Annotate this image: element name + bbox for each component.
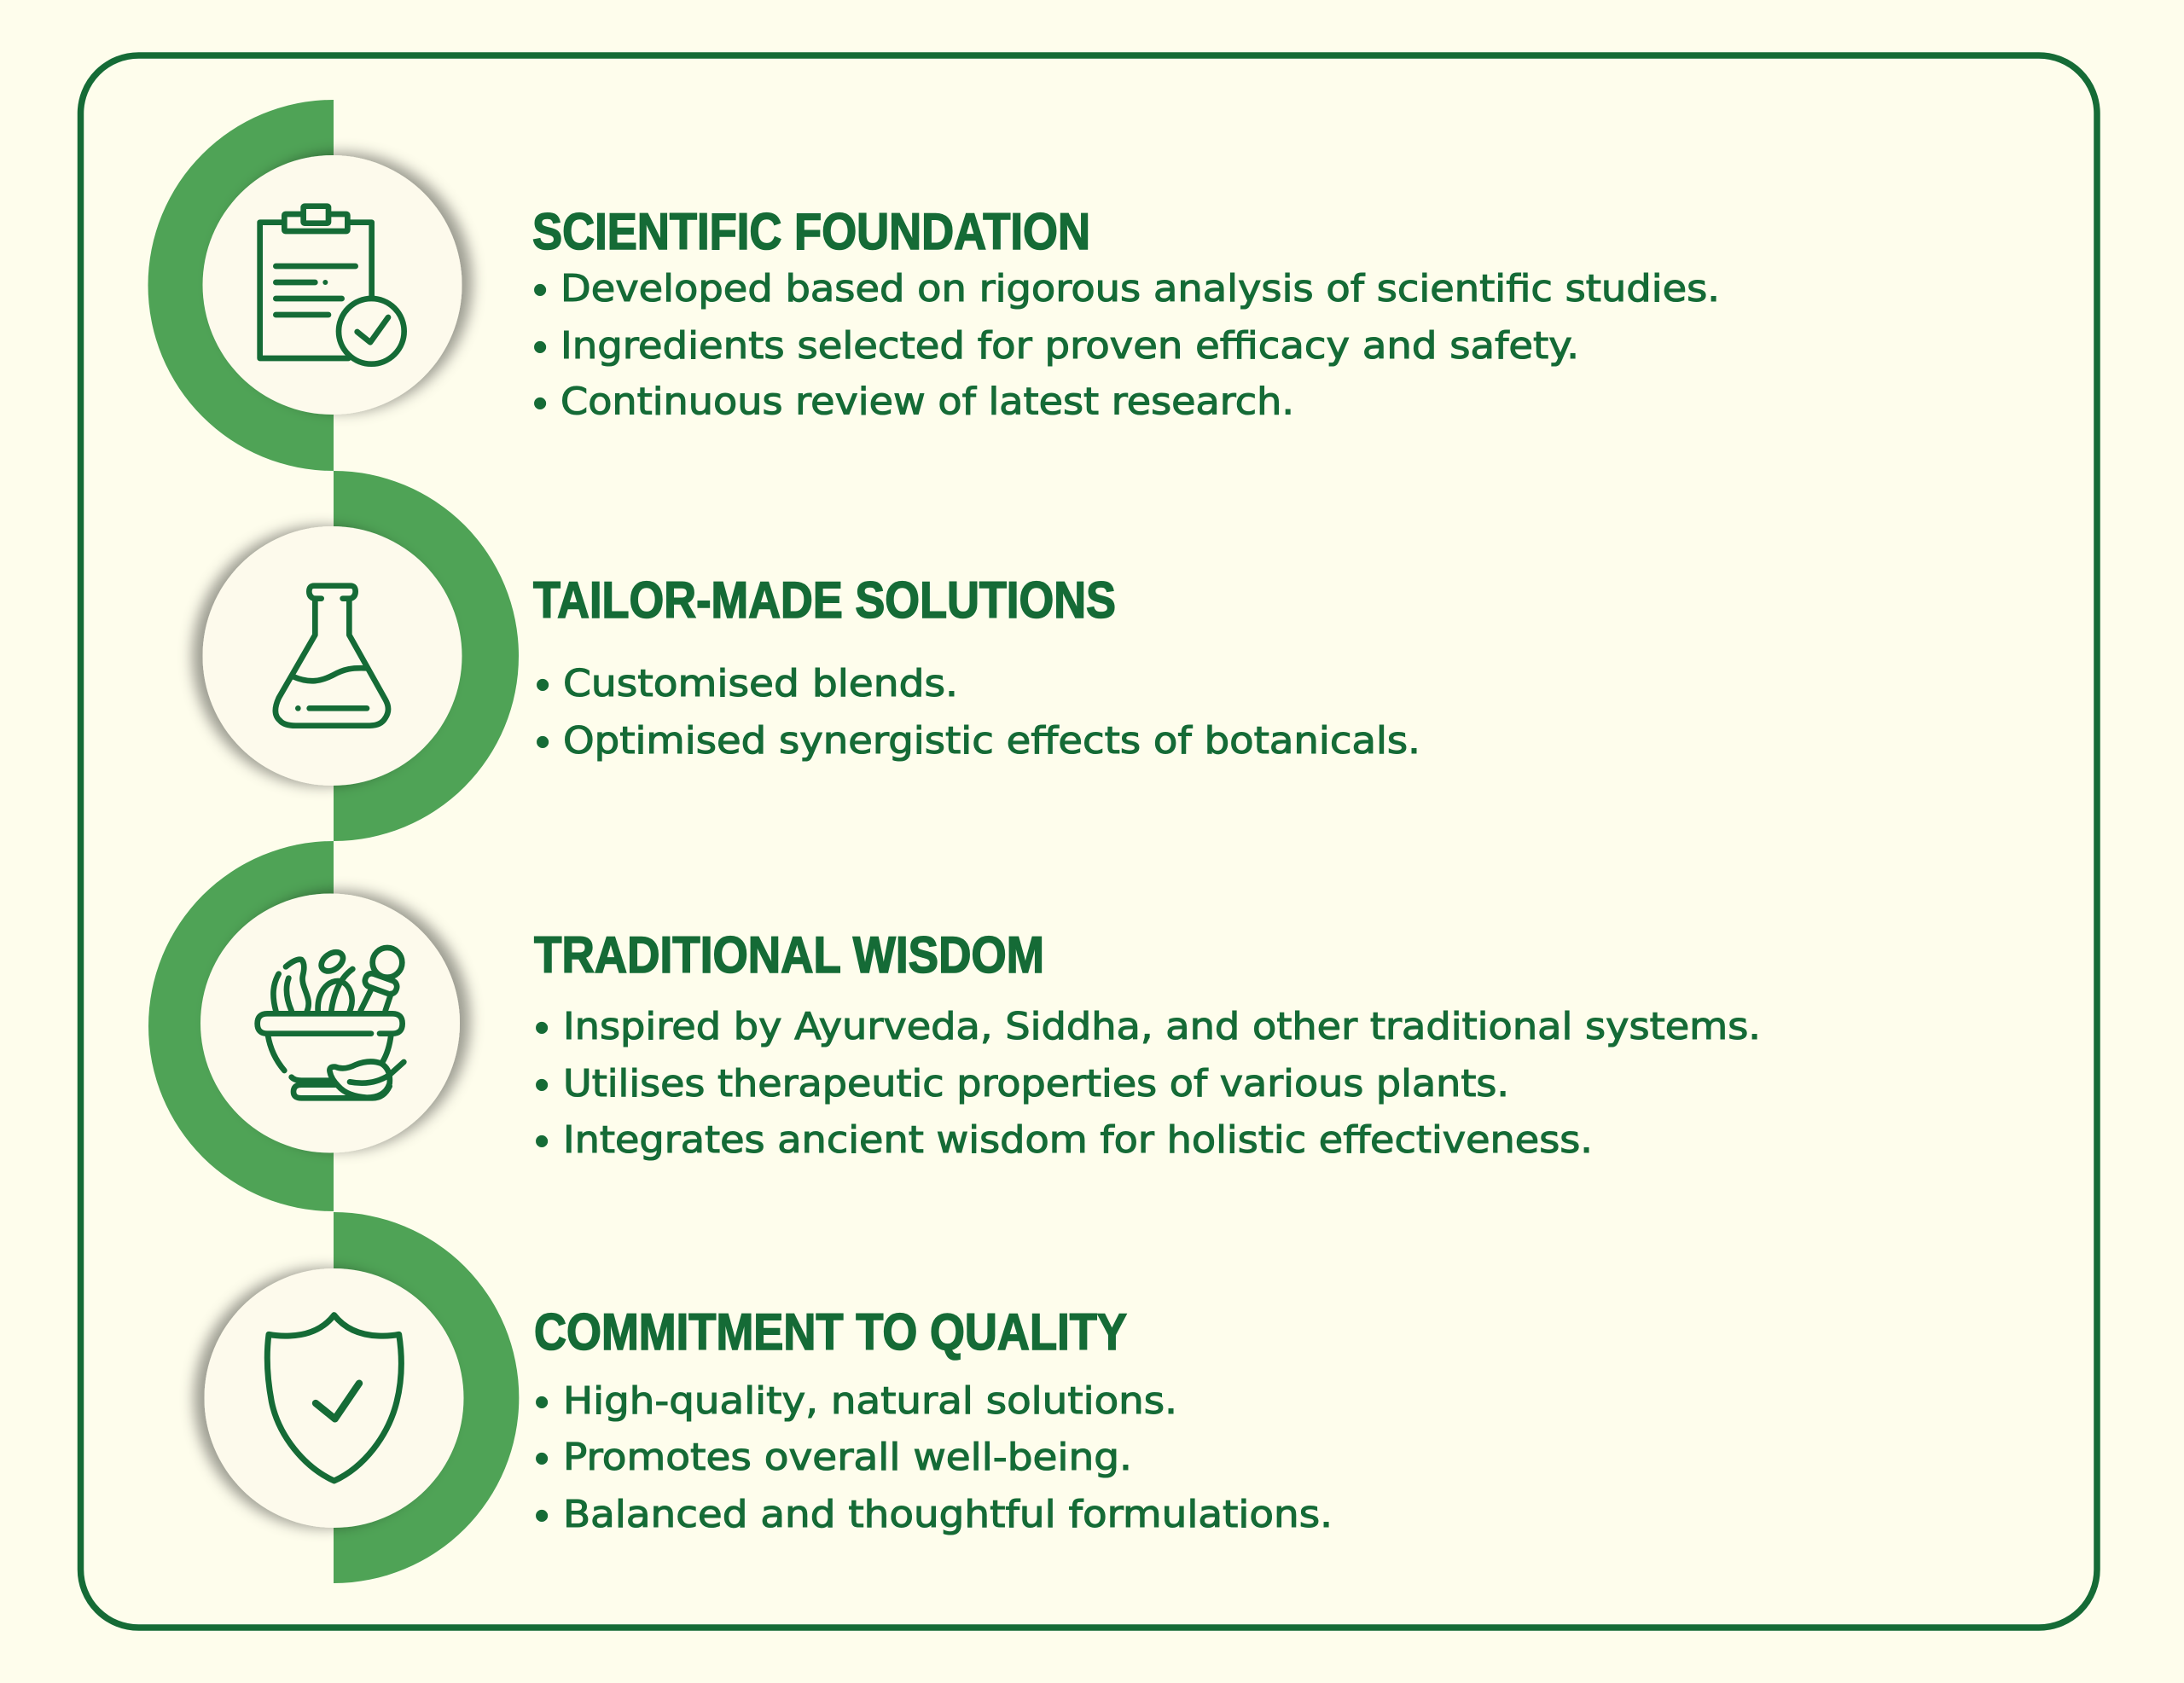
bullet list: scientific foundation: •	[532, 322, 548, 372]
section 3: traditional wisdom	[534, 926, 1761, 1166]
section 2: tailor-made solutions	[533, 572, 1420, 767]
half disc: section 1	[148, 100, 334, 471]
circle: section 2 badge	[203, 526, 462, 786]
bullet list: commitment to quality: •	[534, 1434, 549, 1483]
icon: shield with check	[267, 1315, 401, 1481]
section 1: scientific foundation	[532, 203, 1720, 428]
heading: traditional wisdom: TRADITIONAL WISDOM	[534, 926, 1044, 984]
bullet list: traditional wisdom: Inspired by Ayurveda, Siddha, and other traditional systems.	[563, 1005, 1761, 1048]
heading: tailor-made solutions: TAILOR-MADE SOLUTIONS	[533, 572, 1116, 629]
circle: section 4 badge	[205, 1268, 464, 1528]
bullet list: traditional wisdom: Integrates ancient wisdom for holistic effectiveness.	[563, 1118, 1593, 1162]
icon: flask	[276, 586, 388, 726]
bullet list: scientific foundation: •	[532, 379, 548, 428]
bullet list: commitment to quality: High-quality, natural solutions.	[563, 1379, 1177, 1423]
bullet list: tailor-made solutions: •	[535, 660, 550, 710]
bullet list: tailor-made solutions: Optimised synergistic effects of botanicals.	[563, 719, 1420, 763]
bullet list: scientific foundation	[532, 265, 1720, 428]
circle: section 3 badge	[200, 894, 460, 1153]
icon: mortar and pestle with herbs	[258, 948, 404, 1098]
bullet list: traditional wisdom: •	[534, 1003, 549, 1053]
bullet list: scientific foundation: Developed based on rigorous analysis of scientific studies.	[561, 267, 1720, 310]
bullet list: commitment to quality: •	[534, 1491, 549, 1541]
half disc: section 3	[148, 841, 334, 1211]
bullet list: scientific foundation: Continuous review of latest research.	[561, 380, 1294, 423]
circle: section 1 badge	[203, 155, 462, 415]
bullet list: commitment to quality: Promotes overall well-being.	[563, 1436, 1132, 1479]
section 4: commitment to quality	[534, 1303, 1333, 1541]
bullet list: commitment to quality: Balanced and thoughtful formulations.	[563, 1493, 1333, 1536]
half disc: section 2	[334, 471, 519, 841]
icon: clipboard with check	[260, 206, 404, 364]
bullet list: tailor-made solutions: •	[535, 717, 550, 767]
bullet list: scientific foundation: Ingredients selected for proven efficacy and safety.	[561, 324, 1579, 368]
bullet list: tailor-made solutions: Customised blends.	[563, 662, 958, 705]
half disc: section 4	[334, 1212, 519, 1583]
heading: commitment to quality: COMMITMENT TO QUALITY	[534, 1303, 1127, 1361]
bullet list: commitment to quality: •	[534, 1378, 549, 1427]
bullet list: tailor-made solutions	[535, 660, 1420, 767]
bullet list: traditional wisdom: •	[534, 1117, 549, 1166]
bullet list: traditional wisdom: •	[534, 1060, 549, 1110]
bullet list: commitment to quality	[534, 1378, 1333, 1541]
heading: scientific foundation: SCIENTIFIC FOUNDATION	[532, 203, 1090, 260]
bullet list: traditional wisdom: Utilises therapeutic properties of various plants.	[563, 1062, 1509, 1106]
bullet list: traditional wisdom	[534, 1003, 1761, 1166]
bullet list: scientific foundation: •	[532, 265, 548, 315]
